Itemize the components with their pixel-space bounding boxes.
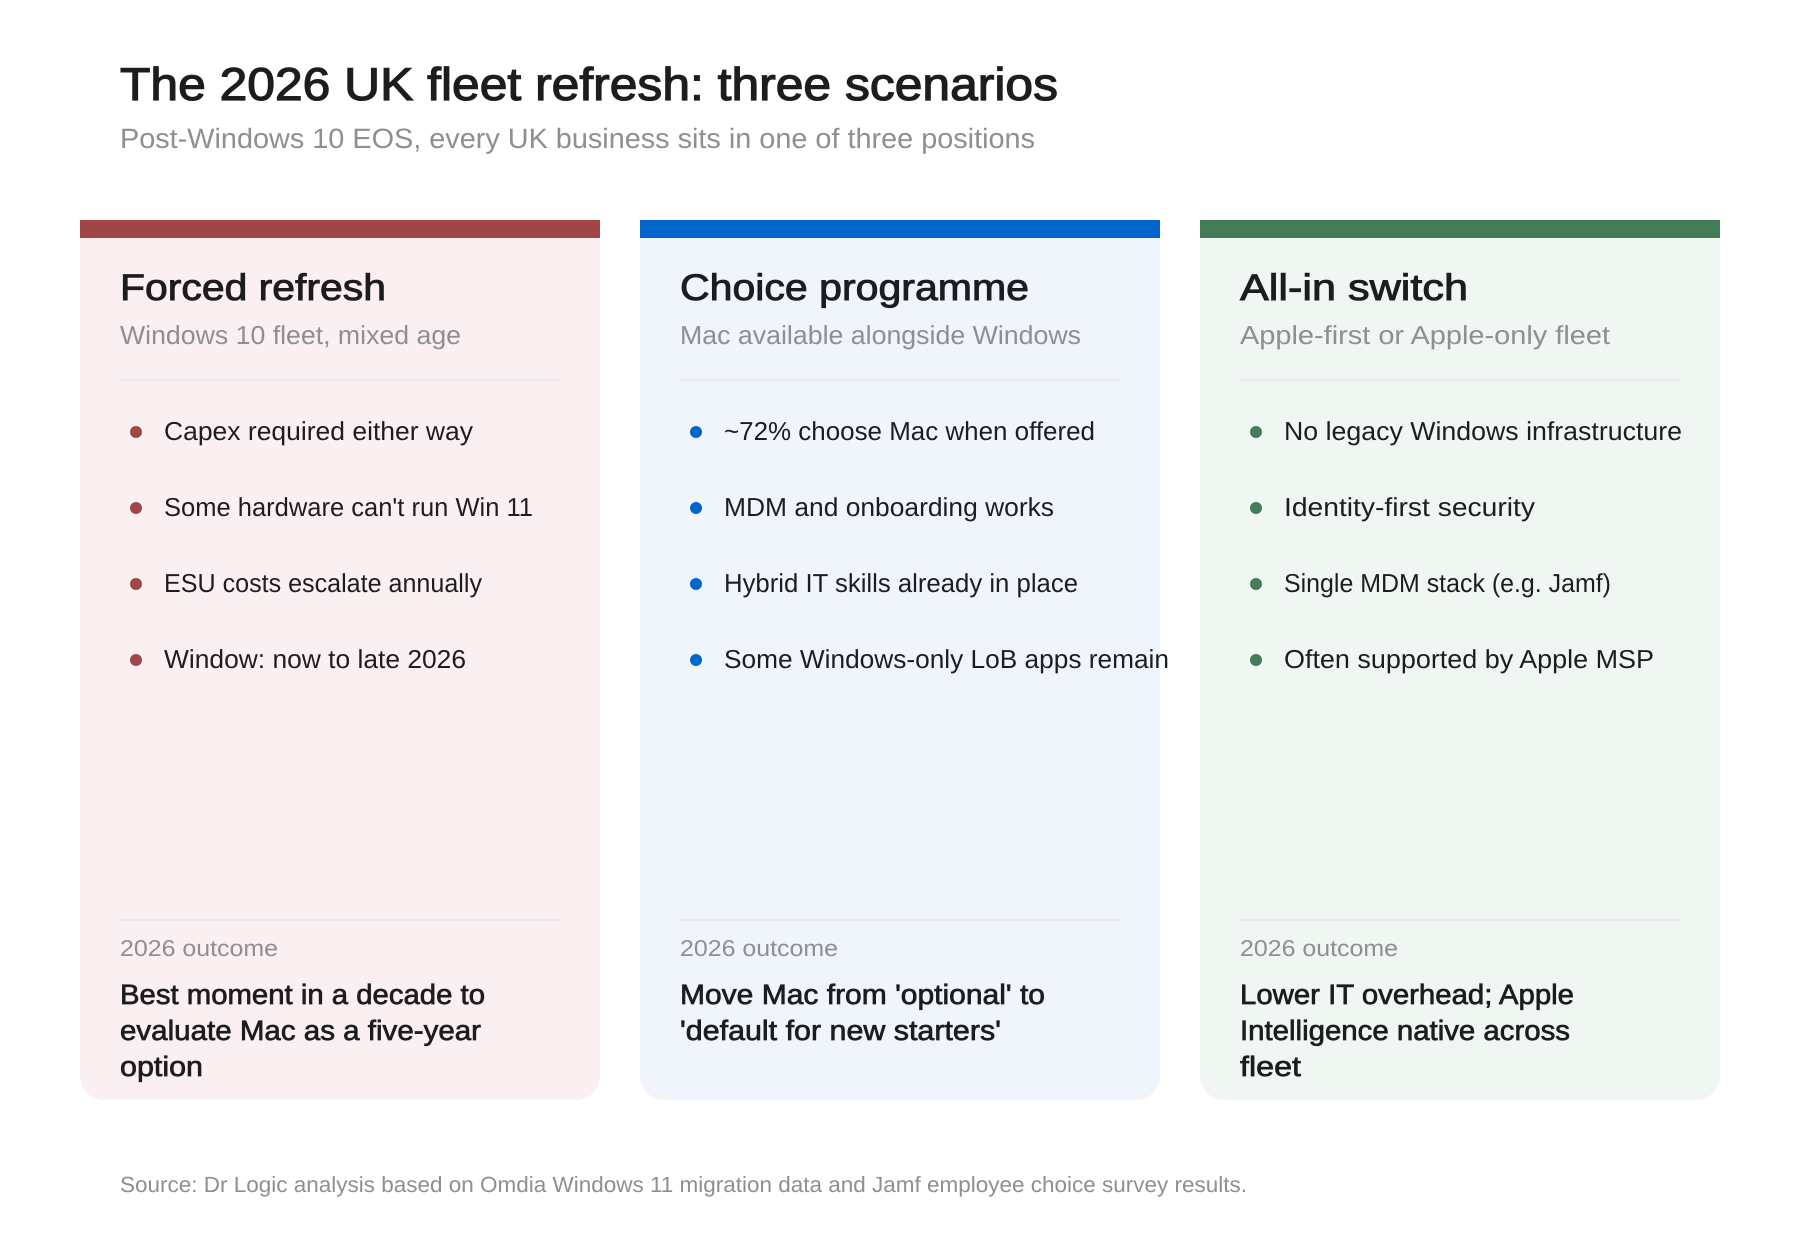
bullet list: ESU costs escalate annually — [164, 568, 482, 598]
accent bar — [80, 220, 600, 238]
card background — [80, 220, 600, 1100]
card background — [640, 220, 1160, 1100]
outcome label: 2026 outcome — [120, 935, 278, 961]
card heading: Choice programme — [680, 267, 1029, 308]
bullet list: Single MDM stack (e.g. Jamf) — [1284, 568, 1611, 598]
card subheading: Apple-first or Apple-only fleet — [1240, 320, 1611, 350]
outcome text: Move Mac from 'optional' to — [680, 979, 1045, 1010]
source note: Source: Dr Logic analysis based on Omdia Windows 11 migration data and Jamf employee choice survey results. — [120, 1172, 1247, 1197]
panel: forced refresh — [80, 220, 600, 1100]
bullet list: ~72% choose Mac when offered — [724, 416, 1095, 446]
outcome text — [680, 979, 1045, 1046]
outcome label: 2026 outcome — [1240, 935, 1398, 961]
card heading: Forced refresh — [120, 267, 386, 308]
card subheading: Windows 10 fleet, mixed age — [120, 320, 461, 350]
bullet list: MDM and onboarding works — [724, 492, 1054, 522]
subtitle: Post-Windows 10 EOS, every UK business sits in one of three positions — [120, 123, 1035, 154]
panel: all-in switch — [1200, 220, 1720, 1100]
card subheading: Mac available alongside Windows — [680, 320, 1081, 350]
outcome text: evaluate Mac as a five-year — [120, 1015, 481, 1046]
bullet list — [1250, 416, 1682, 674]
bullet list: Identity-first security — [1284, 492, 1535, 522]
outcome text: Intelligence native across — [1240, 1015, 1570, 1046]
title: The 2026 UK fleet refresh: three scenarios — [120, 58, 1058, 110]
accent bar — [640, 220, 1160, 238]
outcome label: 2026 outcome — [680, 935, 838, 961]
bullet list: Often supported by Apple MSP — [1284, 644, 1654, 674]
accent bar — [1200, 220, 1720, 238]
outcome text: 'default for new starters' — [680, 1015, 1001, 1046]
card background — [1200, 220, 1720, 1100]
outcome text — [1240, 979, 1574, 1082]
bullet list: Some hardware can't run Win 11 — [164, 492, 533, 522]
bullet list — [130, 416, 533, 674]
bullet list: Some Windows-only LoB apps remain — [724, 644, 1169, 674]
outcome text: Lower IT overhead; Apple — [1240, 979, 1574, 1010]
outcome text: option — [120, 1051, 203, 1082]
bullet list — [690, 416, 1169, 674]
outcome text — [120, 979, 485, 1082]
bullet list: Capex required either way — [164, 416, 473, 446]
bullet list: Hybrid IT skills already in place — [724, 568, 1078, 598]
bullet list: Window: now to late 2026 — [164, 644, 466, 674]
panel: choice programme — [640, 220, 1169, 1100]
bullet list: No legacy Windows infrastructure — [1284, 416, 1682, 446]
card heading: All-in switch — [1240, 267, 1468, 308]
outcome text: Best moment in a decade to — [120, 979, 485, 1010]
outcome text: fleet — [1240, 1051, 1301, 1082]
